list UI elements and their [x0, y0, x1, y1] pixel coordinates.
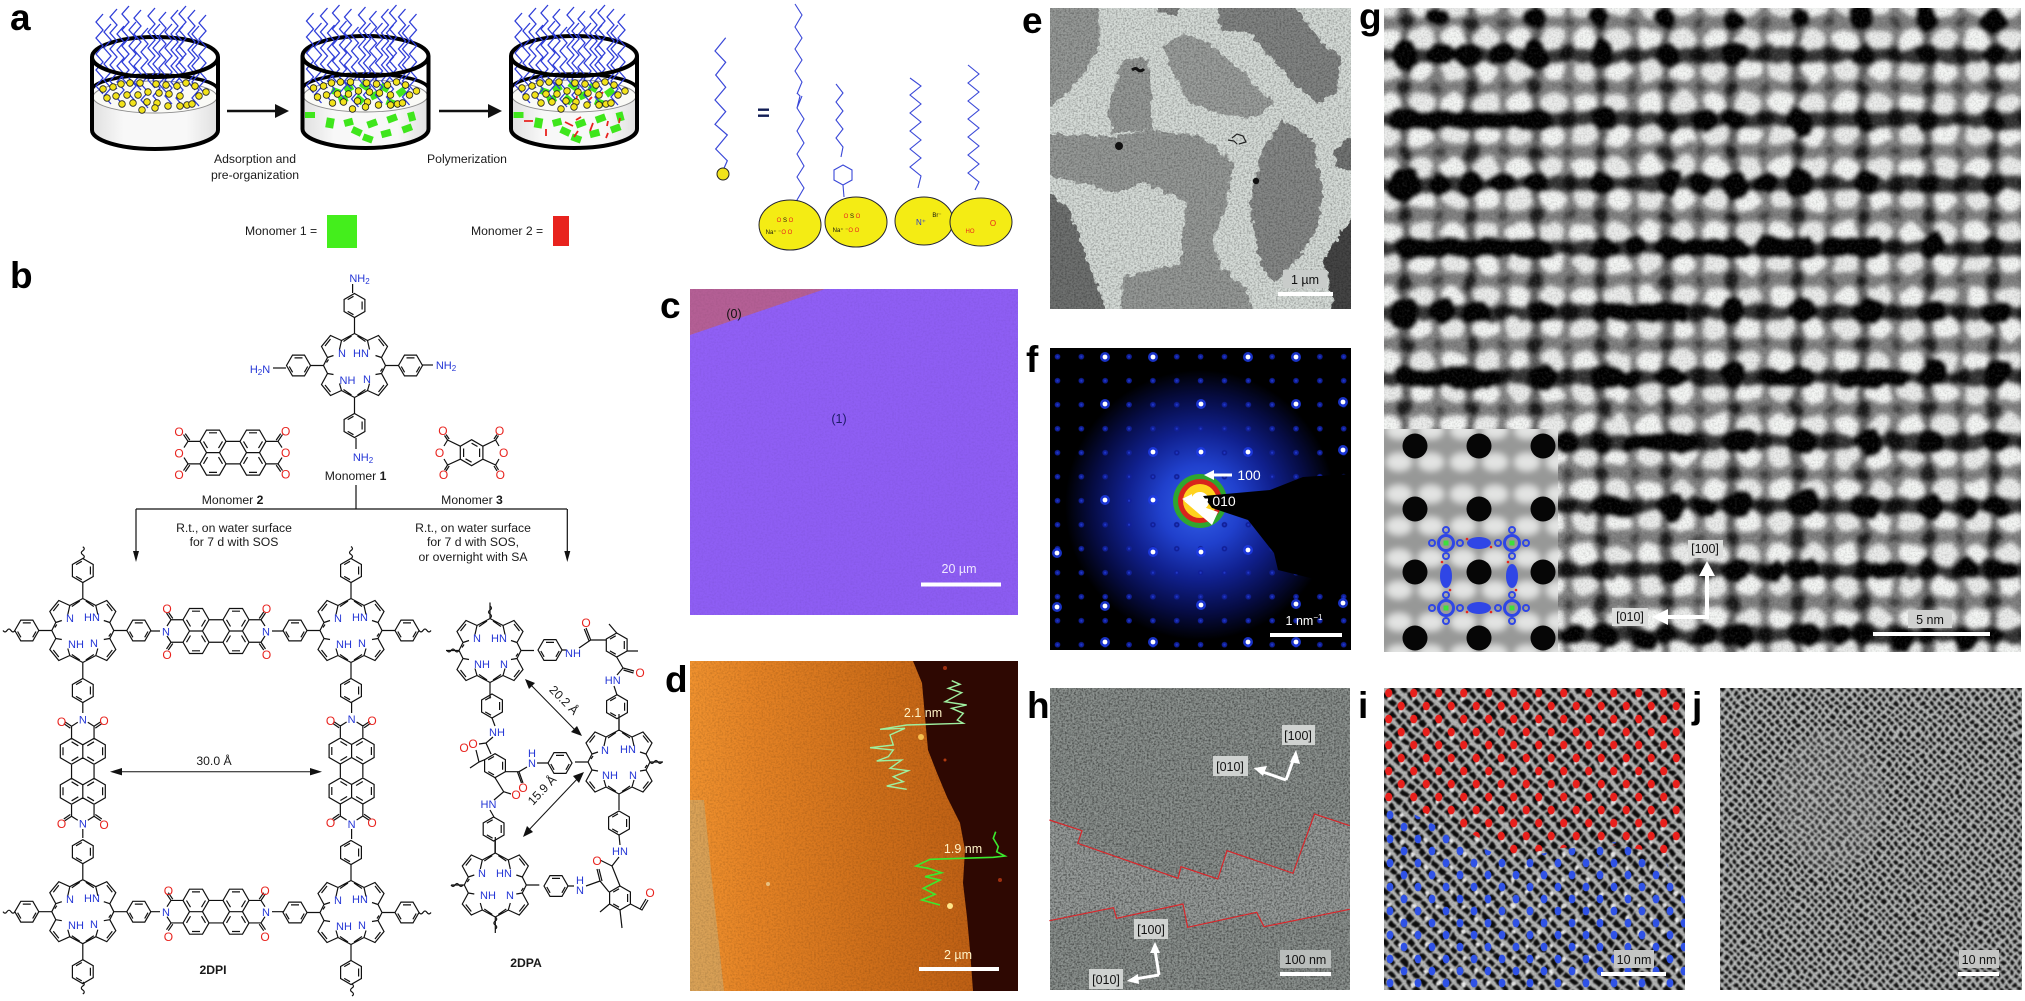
scale bar: 10 nm — [1617, 953, 1651, 967]
upper direction arrows: [100] — [1284, 729, 1312, 743]
right diimide linker: O — [367, 816, 377, 830]
monomer 1 structure: NH — [349, 273, 365, 285]
monomer 1 structure — [250, 273, 457, 465]
label i: i — [1358, 685, 1368, 726]
bottom left porphyrin: HN — [84, 893, 100, 905]
panel i: lattice with domain overlay — [1358, 675, 1700, 1001]
top right tetra-amide linker: O — [635, 666, 645, 680]
bottom right tetra-amide linker: O — [645, 886, 655, 900]
monomer 3 structure: O — [435, 446, 444, 460]
height profile 2.1 nm — [870, 681, 967, 789]
left diimide linker: O — [99, 818, 109, 832]
bottom left porphyrin: N — [90, 919, 98, 931]
legend: monomer 1: Monomer 1 = — [245, 224, 317, 238]
monomer 3 structure: O — [438, 424, 448, 438]
upper direction arrows: [010] — [1216, 760, 1244, 774]
surfactant stearic acid — [950, 65, 1012, 246]
bottom left porphyrin: NH — [68, 920, 84, 932]
right porphyrin: HN — [620, 744, 636, 756]
pore distance arrow — [110, 753, 322, 775]
region labels: (0) — [726, 307, 742, 321]
lower direction arrows: [100] — [1137, 923, 1165, 937]
scale bar: 1 nm — [1286, 614, 1313, 628]
TEM image with crystal domains — [1050, 8, 1351, 309]
right diimide linker: O — [326, 714, 335, 728]
arrow: adsorption step — [227, 104, 289, 118]
bottom porphyrin: HN — [496, 868, 512, 880]
scale bar: 1 µm — [1291, 273, 1319, 287]
direction arrows: [010] — [1616, 610, 1644, 624]
monomer 2 caption: Monomer 2 — [202, 493, 264, 507]
left tetra-amide linker: O — [511, 788, 521, 802]
surfactant SOS: O S O — [777, 218, 794, 224]
TEM image — [1050, 688, 1350, 990]
panel f: electron diffraction pattern — [1026, 339, 1351, 650]
arrow: polymerization step — [439, 104, 502, 118]
overlay: 2DPI structure model — [1429, 527, 1529, 624]
pore distance arrow: 30.0 Å — [196, 753, 232, 768]
direction arrows — [1612, 540, 1723, 626]
left diimide linker: O — [57, 715, 66, 729]
surfactant stearic acid: HO — [966, 229, 975, 235]
conditions right: or overnight with SA — [418, 550, 528, 564]
monomer 2 structure: O — [174, 446, 184, 460]
lattice image — [1720, 688, 2022, 990]
2DPI network — [3, 546, 431, 996]
callout: 010 reflection — [1182, 493, 1236, 509]
monomer 3 structure: O — [495, 424, 504, 438]
red dots domain — [1384, 688, 1685, 855]
caption: adsorption and pre-organization: pre-organization — [211, 168, 299, 182]
label j: j — [1691, 685, 1702, 726]
scale bar — [921, 562, 1001, 586]
left tetra-amide linker — [459, 718, 548, 853]
height profile 1.9 nm: 1.9 nm — [944, 842, 982, 856]
panel e: TEM low magnification — [1022, 0, 1360, 320]
label d: d — [665, 659, 688, 700]
monomer 3 structure: O — [499, 446, 508, 460]
right porphyrin — [548, 714, 663, 835]
callout: 100 reflection: 100 — [1237, 467, 1261, 483]
height profile 1.9 nm — [916, 832, 1005, 905]
top diimide linker: O — [262, 602, 271, 616]
surfactant SDBS — [825, 84, 887, 247]
left tetra-amide linker: N — [528, 758, 536, 770]
reaction tree arrows — [133, 485, 570, 562]
scale bar — [1601, 950, 1666, 976]
top right porphyrin: NH — [336, 639, 352, 651]
bottom porphyrin: N — [506, 890, 514, 902]
scale bar: 2 µm — [944, 948, 972, 962]
monomer 1 structure: 2 — [258, 368, 263, 377]
top left porphyrin: N — [90, 638, 98, 650]
bottom right porphyrin: NH — [336, 921, 352, 933]
panel c: optical micrograph: (1) — [831, 412, 847, 426]
bottom porphyrin — [451, 837, 568, 933]
monomer 3 structure: O — [496, 468, 505, 482]
scale bar — [919, 948, 999, 971]
top right tetra-amide linker — [562, 616, 645, 731]
scale bar: 10 nm — [1962, 953, 1996, 967]
surfactant SOS: Na⁺ ⁻O O — [766, 229, 793, 236]
direction arrows: [100] — [1691, 542, 1719, 556]
monomer 1 structure: 2 — [369, 456, 374, 465]
monomer 1 structure: NH — [436, 360, 452, 372]
height profile 2.1 nm: 2.1 nm — [904, 706, 942, 720]
monomer 1 structure: NH — [340, 375, 355, 387]
label b: b — [10, 255, 33, 296]
panel b: chemical synthesis scheme — [3, 255, 663, 996]
left tetra-amide linker: NH — [489, 727, 505, 739]
monomer 1 structure: H — [250, 364, 258, 376]
upper direction arrows — [1213, 725, 1315, 780]
left diimide linker — [57, 702, 109, 838]
monomer 2 structure: O — [281, 446, 290, 460]
left tetra-amide linker: H — [528, 748, 536, 760]
bottom diimide linker: N — [162, 907, 170, 919]
distance arrow 20.2: 20.2 Å — [546, 682, 583, 718]
HRTEM lattice — [1384, 8, 2021, 652]
label h: h — [1027, 685, 1050, 726]
scale bar — [1958, 950, 1999, 976]
top right porphyrin: N — [358, 638, 366, 650]
top right tetra-amide linker: O — [581, 616, 591, 630]
beaker 2: monomer 1 adsorbed — [302, 5, 428, 148]
bottom porphyrin: NH — [480, 890, 496, 902]
scale bar — [1873, 610, 1990, 636]
bottom diimide linker — [151, 884, 284, 944]
right diimide linker: N — [348, 819, 356, 831]
left diimide linker: N — [79, 818, 87, 830]
distance arrow 15.9: 15.9 Å — [524, 771, 560, 808]
2DPA caption: 2DPA — [510, 956, 542, 970]
beaker 1: surfactant monolayer on water — [92, 6, 218, 149]
top right porphyrin: HN — [352, 612, 368, 624]
monomer 3 structure — [435, 424, 508, 482]
right porphyrin: N — [601, 745, 609, 757]
surfactant stearic acid: O — [990, 219, 996, 228]
bottom diimide linker: O — [164, 884, 173, 898]
top porphyrin: N — [500, 659, 508, 671]
top diimide linker: O — [262, 648, 271, 662]
legend: monomer 1 — [245, 215, 357, 248]
lattice image — [1384, 688, 1685, 990]
bottom right porphyrin: N — [334, 895, 342, 907]
conditions left: R.t., on water surface — [176, 521, 292, 535]
bottom right tetra-amide linker: O — [592, 854, 602, 868]
surfactant SDBS: O S O — [844, 214, 861, 220]
conditions right: R.t., on water surface — [415, 521, 531, 535]
2DPA network — [446, 602, 663, 970]
caption: adsorption and pre-organization: Adsorption and — [214, 152, 296, 166]
scale bar: −1 — [1313, 613, 1323, 622]
monomer 2 structure: O — [281, 424, 290, 438]
monomer 1 structure: NH — [353, 452, 369, 464]
red boundary line lower — [1049, 904, 1350, 927]
bottom diimide linker: O — [164, 930, 173, 944]
monomer 2 structure: O — [174, 468, 184, 482]
callout: 010 reflection: 010 — [1212, 493, 1236, 509]
legend: monomer 2: Monomer 2 = — [471, 224, 543, 238]
bottom right tetra-amide linker — [568, 835, 655, 928]
panel c: optical micrograph — [660, 285, 1018, 615]
bottom right porphyrin — [283, 840, 431, 996]
surfactant ammonium bromide: Br⁻ — [932, 213, 942, 219]
top diimide linker: O — [162, 648, 172, 662]
top diimide linker — [151, 602, 284, 662]
left tetra-amide linker: O — [518, 781, 528, 795]
monomer 3 caption: Monomer 3 — [441, 493, 503, 507]
callout: 100 reflection — [1204, 467, 1261, 483]
red boundary line upper — [1049, 814, 1350, 879]
monomer 2 structure — [174, 424, 290, 482]
scale bar — [1270, 613, 1342, 637]
legend: monomer 2 — [471, 216, 569, 246]
bottom diimide linker: N — [262, 907, 270, 919]
conditions left: for 7 d with SOS — [190, 535, 278, 549]
caption: polymerization: Polymerization — [427, 152, 507, 166]
monomer 1 structure: N — [363, 374, 371, 386]
micrograph — [690, 289, 1018, 615]
distance arrow 15.9 — [523, 771, 584, 837]
scale bar: 5 nm — [1916, 613, 1944, 627]
left diimide linker: O — [99, 714, 109, 728]
equals sign — [758, 108, 769, 117]
top porphyrin: NH — [474, 659, 490, 671]
AFM topography — [690, 661, 1018, 991]
diffraction image — [1050, 348, 1351, 650]
label e: e — [1022, 0, 1043, 41]
top left porphyrin: HN — [84, 612, 100, 624]
monomer 1 caption: Monomer 1 — [325, 469, 387, 483]
left diimide linker: N — [79, 714, 87, 726]
monomer 2 structure: O — [174, 425, 184, 439]
panel j: lattice image — [1691, 675, 2025, 1001]
bottom right tetra-amide linker: HN — [612, 846, 628, 858]
top right porphyrin: N — [334, 613, 342, 625]
right porphyrin: N — [629, 770, 637, 782]
top diimide linker: N — [262, 626, 270, 638]
top left porphyrin — [3, 547, 151, 702]
bottom diimide linker: O — [260, 884, 270, 898]
top right tetra-amide linker: NH — [565, 648, 581, 660]
monomer 3 structure: O — [439, 468, 448, 482]
monomer 1 structure: N — [262, 364, 270, 376]
top diimide linker: N — [162, 626, 170, 638]
top porphyrin: N — [473, 633, 481, 645]
bottom right porphyrin: HN — [352, 894, 368, 906]
bottom left porphyrin — [3, 840, 151, 994]
top diimide linker: O — [162, 602, 172, 616]
label c: c — [660, 285, 681, 326]
bottom porphyrin: N — [478, 868, 486, 880]
left tetra-amide linker: O — [459, 741, 469, 755]
inset: simulated image with structure overlay — [1384, 429, 1558, 652]
monomer 1 structure: 2 — [452, 364, 457, 373]
surfactant SDBS: Na⁺ ⁻O O — [833, 227, 860, 234]
bottom right tetra-amide linker: H — [576, 875, 584, 887]
lower direction arrows — [1089, 919, 1168, 989]
scale bar — [1278, 270, 1333, 296]
monomer 1 structure: 2 — [365, 277, 370, 286]
label f: f — [1026, 339, 1039, 380]
panel d: AFM image — [665, 659, 1018, 991]
bottom diimide linker: O — [260, 930, 270, 944]
top right porphyrin — [283, 546, 431, 702]
panel a: interfacial synthesis scheme — [10, 0, 1012, 250]
scale bar: 100 nm — [1285, 953, 1326, 967]
top porphyrin — [446, 602, 562, 718]
top right tetra-amide linker: HN — [605, 675, 621, 687]
top left porphyrin: NH — [68, 639, 84, 651]
distance arrow 20.2 — [525, 679, 583, 736]
top porphyrin: HN — [491, 633, 507, 645]
blue dots domain — [1384, 805, 1685, 990]
panel g: high-resolution lattice image — [1359, 0, 2025, 670]
beaker 3: monomers 1 and 2 polymerizing — [511, 5, 637, 148]
lower direction arrows: [010] — [1092, 973, 1120, 987]
scale bar: 20 µm — [942, 562, 976, 576]
left tetra-amide linker: HN — [481, 799, 496, 811]
left diimide linker: O — [57, 817, 66, 831]
2DPI caption: 2DPI — [199, 963, 227, 977]
surfactant ammonium bromide: N⁺ — [916, 218, 926, 227]
bottom left porphyrin: N — [66, 894, 74, 906]
monomer 2 structure: O — [281, 468, 290, 482]
bottom right porphyrin: N — [358, 920, 366, 932]
right diimide linker: O — [367, 714, 377, 728]
panel h: grain boundary TEM — [1027, 685, 1350, 990]
right diimide linker — [326, 702, 377, 839]
right porphyrin: NH — [602, 770, 618, 782]
conditions right: for 7 d with SOS, — [427, 535, 519, 549]
surfactant SOS — [759, 4, 821, 250]
bottom right tetra-amide linker: N — [576, 885, 584, 897]
right diimide linker: O — [326, 816, 335, 830]
left tetra-amide linker: O — [468, 737, 478, 751]
icon: surfactant chain with head — [715, 38, 729, 180]
surfactant ammonium bromide — [895, 78, 953, 245]
top left porphyrin: N — [66, 613, 74, 625]
monomer 1 structure: HN — [353, 348, 369, 360]
monomer 1 structure: N — [338, 348, 346, 360]
scale bar — [1280, 950, 1331, 976]
right diimide linker: N — [348, 714, 356, 726]
